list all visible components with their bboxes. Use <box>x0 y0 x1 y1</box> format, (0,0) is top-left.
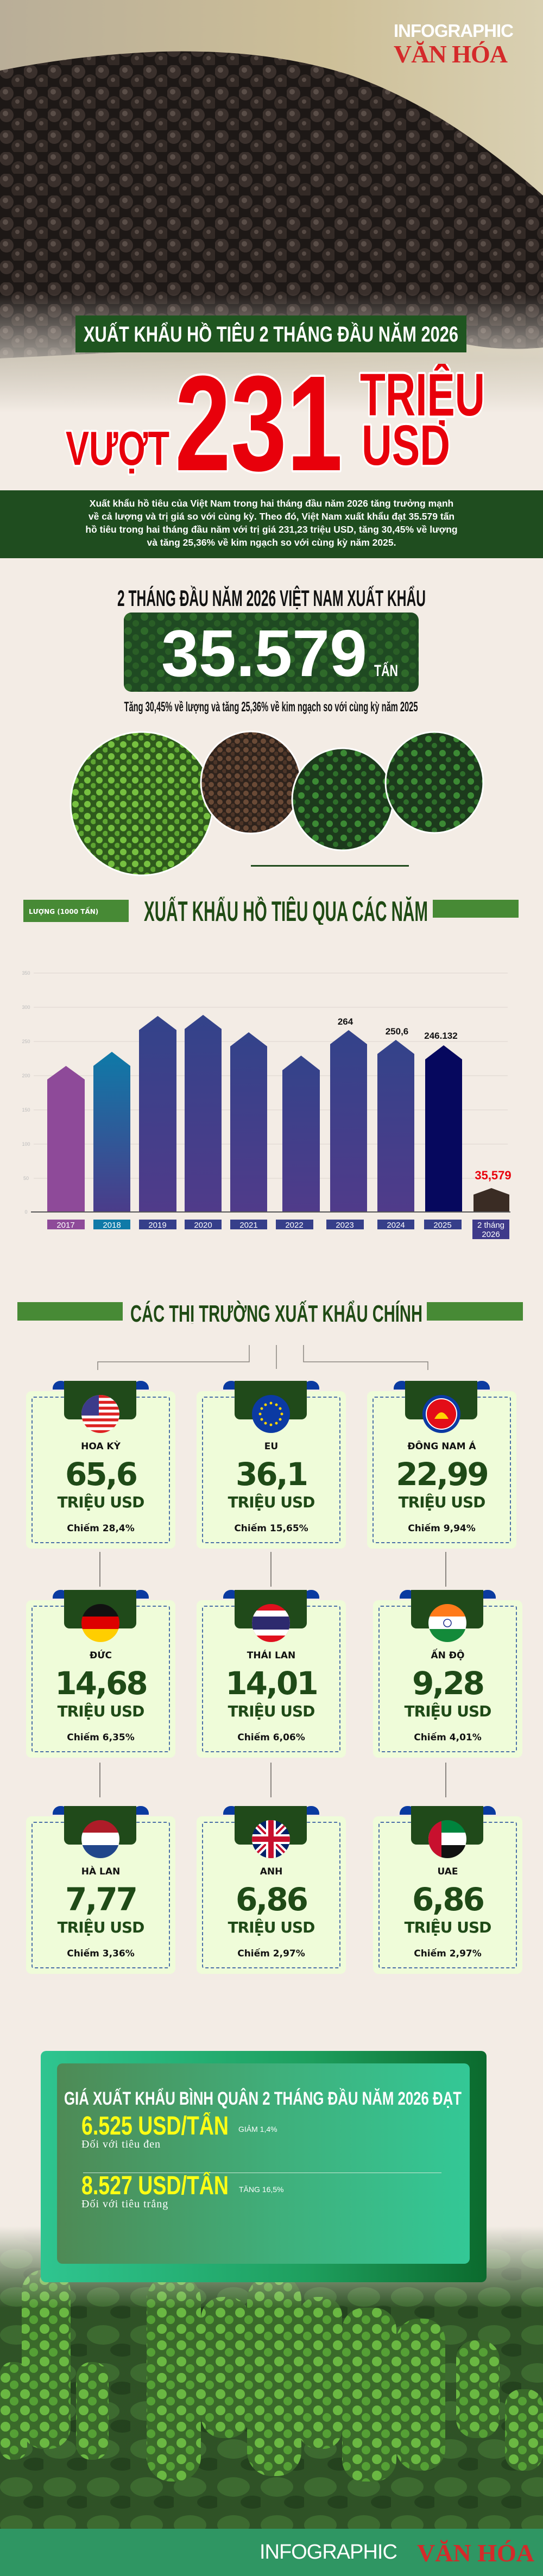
bar chart: export volume by year: 150 <box>22 1107 30 1113</box>
card: Ha Lan: TRIỆU USD <box>58 1918 144 1936</box>
card: An Do: 9,28 <box>412 1665 483 1702</box>
bar chart: export volume by year: 2023 <box>336 1221 354 1230</box>
chart header: LƯỢNG (1000 TẤN) <box>29 908 98 916</box>
icon: Netherlands flag <box>81 1820 119 1858</box>
icon: EU flag <box>252 1395 290 1433</box>
card: Dong Nam A: 22,99 <box>396 1456 488 1493</box>
headline: vuot 231 trieu usd <box>64 364 485 478</box>
card: Duc <box>26 1600 175 1758</box>
intro text band: và tăng 25,36% về kim ngạch so với cùng kỳ năm 2025. <box>147 537 396 548</box>
bar chart: export volume by year: 2025 <box>433 1221 452 1230</box>
photo circles <box>70 731 484 876</box>
price: black pepper <box>81 2112 277 2150</box>
big number box 35.579 tan: 35.579 <box>161 616 367 690</box>
logo: infographic van hoa: VĂN HÓA <box>394 40 507 68</box>
big number box 35.579 tan: TẤN <box>374 661 398 680</box>
price: white pepper <box>81 2172 283 2210</box>
card: Thai Lan: TRIỆU USD <box>228 1702 314 1720</box>
connector lines <box>97 1345 428 1370</box>
bar chart: export volume by year: 2018 <box>103 1221 121 1230</box>
circle photo 1 <box>71 732 213 875</box>
bar chart: export volume by year: 2020 <box>194 1221 212 1230</box>
card: Thai Lan: Chiếm 6,06% <box>237 1732 305 1743</box>
card: Anh <box>197 1816 346 1974</box>
section heading: main markets <box>17 1300 523 1324</box>
bar chart: export volume by year: 246.132 <box>424 1031 458 1041</box>
price: black pepper: Đối với tiêu đen <box>81 2138 161 2150</box>
card: Duc: Chiếm 6,35% <box>67 1732 135 1743</box>
card: UAE <box>373 1816 522 1974</box>
bar chart: export volume by year: 200 <box>22 1073 30 1078</box>
card: Dong Nam A: ĐÔNG NAM Á <box>407 1441 476 1452</box>
bar chart: export volume by year: 250 <box>22 1039 30 1044</box>
card: Dong Nam A: Chiếm 9,94% <box>408 1523 476 1534</box>
circle photo 4 <box>386 732 483 833</box>
icon: US flag <box>81 1395 119 1433</box>
card: EU: Chiếm 15,65% <box>234 1523 308 1534</box>
intro text band <box>0 490 543 558</box>
card: Anh: ANH <box>260 1866 282 1877</box>
card: UAE: TRIỆU USD <box>405 1918 491 1936</box>
big number box 35.579 tan <box>124 613 419 692</box>
card: Ha Lan: Chiếm 3,36% <box>67 1948 135 1959</box>
card: Hoa Ky: Chiếm 28,4% <box>67 1523 135 1534</box>
icon: UK flag <box>252 1820 290 1858</box>
bar chart: export volume by year: 2026 <box>482 1230 500 1239</box>
icon: ASEAN flag <box>422 1395 460 1433</box>
bar chart: export volume by year: 300 <box>22 1005 30 1010</box>
bar chart: export volume by year: 35,579 <box>475 1169 512 1182</box>
intro text band: Xuất khẩu hồ tiêu của Việt Nam trong hai tháng đầu năm 2026 tăng trưởng mạnh <box>90 498 453 509</box>
card: EU: TRIỆU USD <box>228 1493 314 1511</box>
bar chart: export volume by year: 50 <box>23 1176 29 1181</box>
bottom photo: green pepper clusters <box>0 2230 543 2529</box>
card: UAE: Chiếm 2,97% <box>414 1948 482 1959</box>
card: Anh: TRIỆU USD <box>228 1918 314 1936</box>
card: Thai Lan <box>197 1600 346 1758</box>
price: black pepper: GIẢM 1,4% <box>238 2125 277 2133</box>
bar chart: export volume by year: 264 <box>338 1016 353 1027</box>
footer band with logo: INFOGRAPHIC <box>260 2541 397 2564</box>
intro text band: hồ tiêu trong hai tháng đầu năm với trị giá 231,23 triệu USD, tăng 30,45% về lượng <box>85 524 458 535</box>
intro text band: về cả lượng và trị giá so với cùng kỳ. Theo đó, Việt Nam xuất khẩu đạt 35.579 tấn <box>89 511 454 522</box>
card: Dong Nam A <box>367 1391 516 1549</box>
card: Ha Lan: 7,77 <box>65 1881 136 1918</box>
circle photo 2 <box>201 731 301 834</box>
card: Duc: 14,68 <box>55 1665 147 1702</box>
card: An Do: Chiếm 4,01% <box>414 1732 482 1743</box>
card: Ha Lan: HÀ LAN <box>81 1866 120 1877</box>
bar chart: export volume by year: 2024 <box>387 1221 405 1230</box>
card: EU: EU <box>264 1441 278 1452</box>
price: white pepper: Đối với tiêu trắng <box>81 2198 168 2210</box>
bar chart: export volume by year <box>22 970 512 1239</box>
icon: India flag <box>428 1604 466 1642</box>
card: An Do: ẤN ĐỘ <box>431 1650 465 1661</box>
bar chart: export volume by year: 2019 <box>148 1221 167 1230</box>
price: white pepper: TĂNG 16,5% <box>239 2185 283 2194</box>
bar chart: export volume by year: 0 <box>24 1209 28 1215</box>
card: Hoa Ky: TRIỆU USD <box>58 1493 144 1511</box>
card: Dong Nam A: TRIỆU USD <box>399 1493 485 1511</box>
card: An Do <box>373 1600 522 1758</box>
card: Anh: 6,86 <box>236 1881 307 1918</box>
card: Duc: ĐỨC <box>90 1650 112 1661</box>
headline: vuot 231 trieu usd: VƯỢT <box>66 421 169 475</box>
footer band with logo: VĂN HÓA <box>417 2539 534 2567</box>
card: Thai Lan: 14,01 <box>225 1665 317 1702</box>
card: UAE: 6,86 <box>412 1881 483 1918</box>
icon: Thailand flag <box>252 1604 290 1642</box>
card: UAE: UAE <box>437 1866 458 1877</box>
footer band with logo <box>0 2529 543 2576</box>
card: Hoa Ky: 65,6 <box>65 1456 136 1493</box>
title banner <box>75 315 466 352</box>
chart header <box>23 896 519 925</box>
card: EU: 36,1 <box>236 1456 307 1493</box>
card: Duc: TRIỆU USD <box>58 1702 144 1720</box>
icon: Germany flag <box>81 1604 119 1642</box>
card: Anh: Chiếm 2,97% <box>237 1948 305 1959</box>
logo: infographic van hoa: INFOGRAPHIC <box>394 21 513 41</box>
icon: UAE flag <box>428 1820 466 1858</box>
bar chart: export volume by year: 2 tháng <box>477 1221 504 1230</box>
bar chart: export volume by year: 350 <box>22 970 30 976</box>
bar chart: export volume by year: 2021 <box>239 1221 258 1230</box>
bar chart: export volume by year: 100 <box>22 1141 30 1147</box>
card: Ha Lan <box>26 1816 175 1974</box>
bar chart: export volume by year: 2017 <box>56 1221 75 1230</box>
card: Hoa Ky: HOA KỲ <box>81 1441 121 1452</box>
card: EU <box>197 1391 346 1549</box>
card: An Do: TRIỆU USD <box>405 1702 491 1720</box>
circle photo 3 <box>292 748 393 850</box>
headline: vuot 231 trieu usd: USD <box>362 414 450 477</box>
card: Thai Lan: THÁI LAN <box>247 1650 295 1661</box>
hero photo: black pepper heap <box>0 0 543 404</box>
bar chart: export volume by year: 250,6 <box>386 1026 408 1037</box>
logo: infographic van hoa <box>394 21 513 68</box>
card: Hoa Ky <box>26 1391 175 1549</box>
bar chart: export volume by year: 2022 <box>285 1221 304 1230</box>
price panel <box>41 2051 487 2282</box>
